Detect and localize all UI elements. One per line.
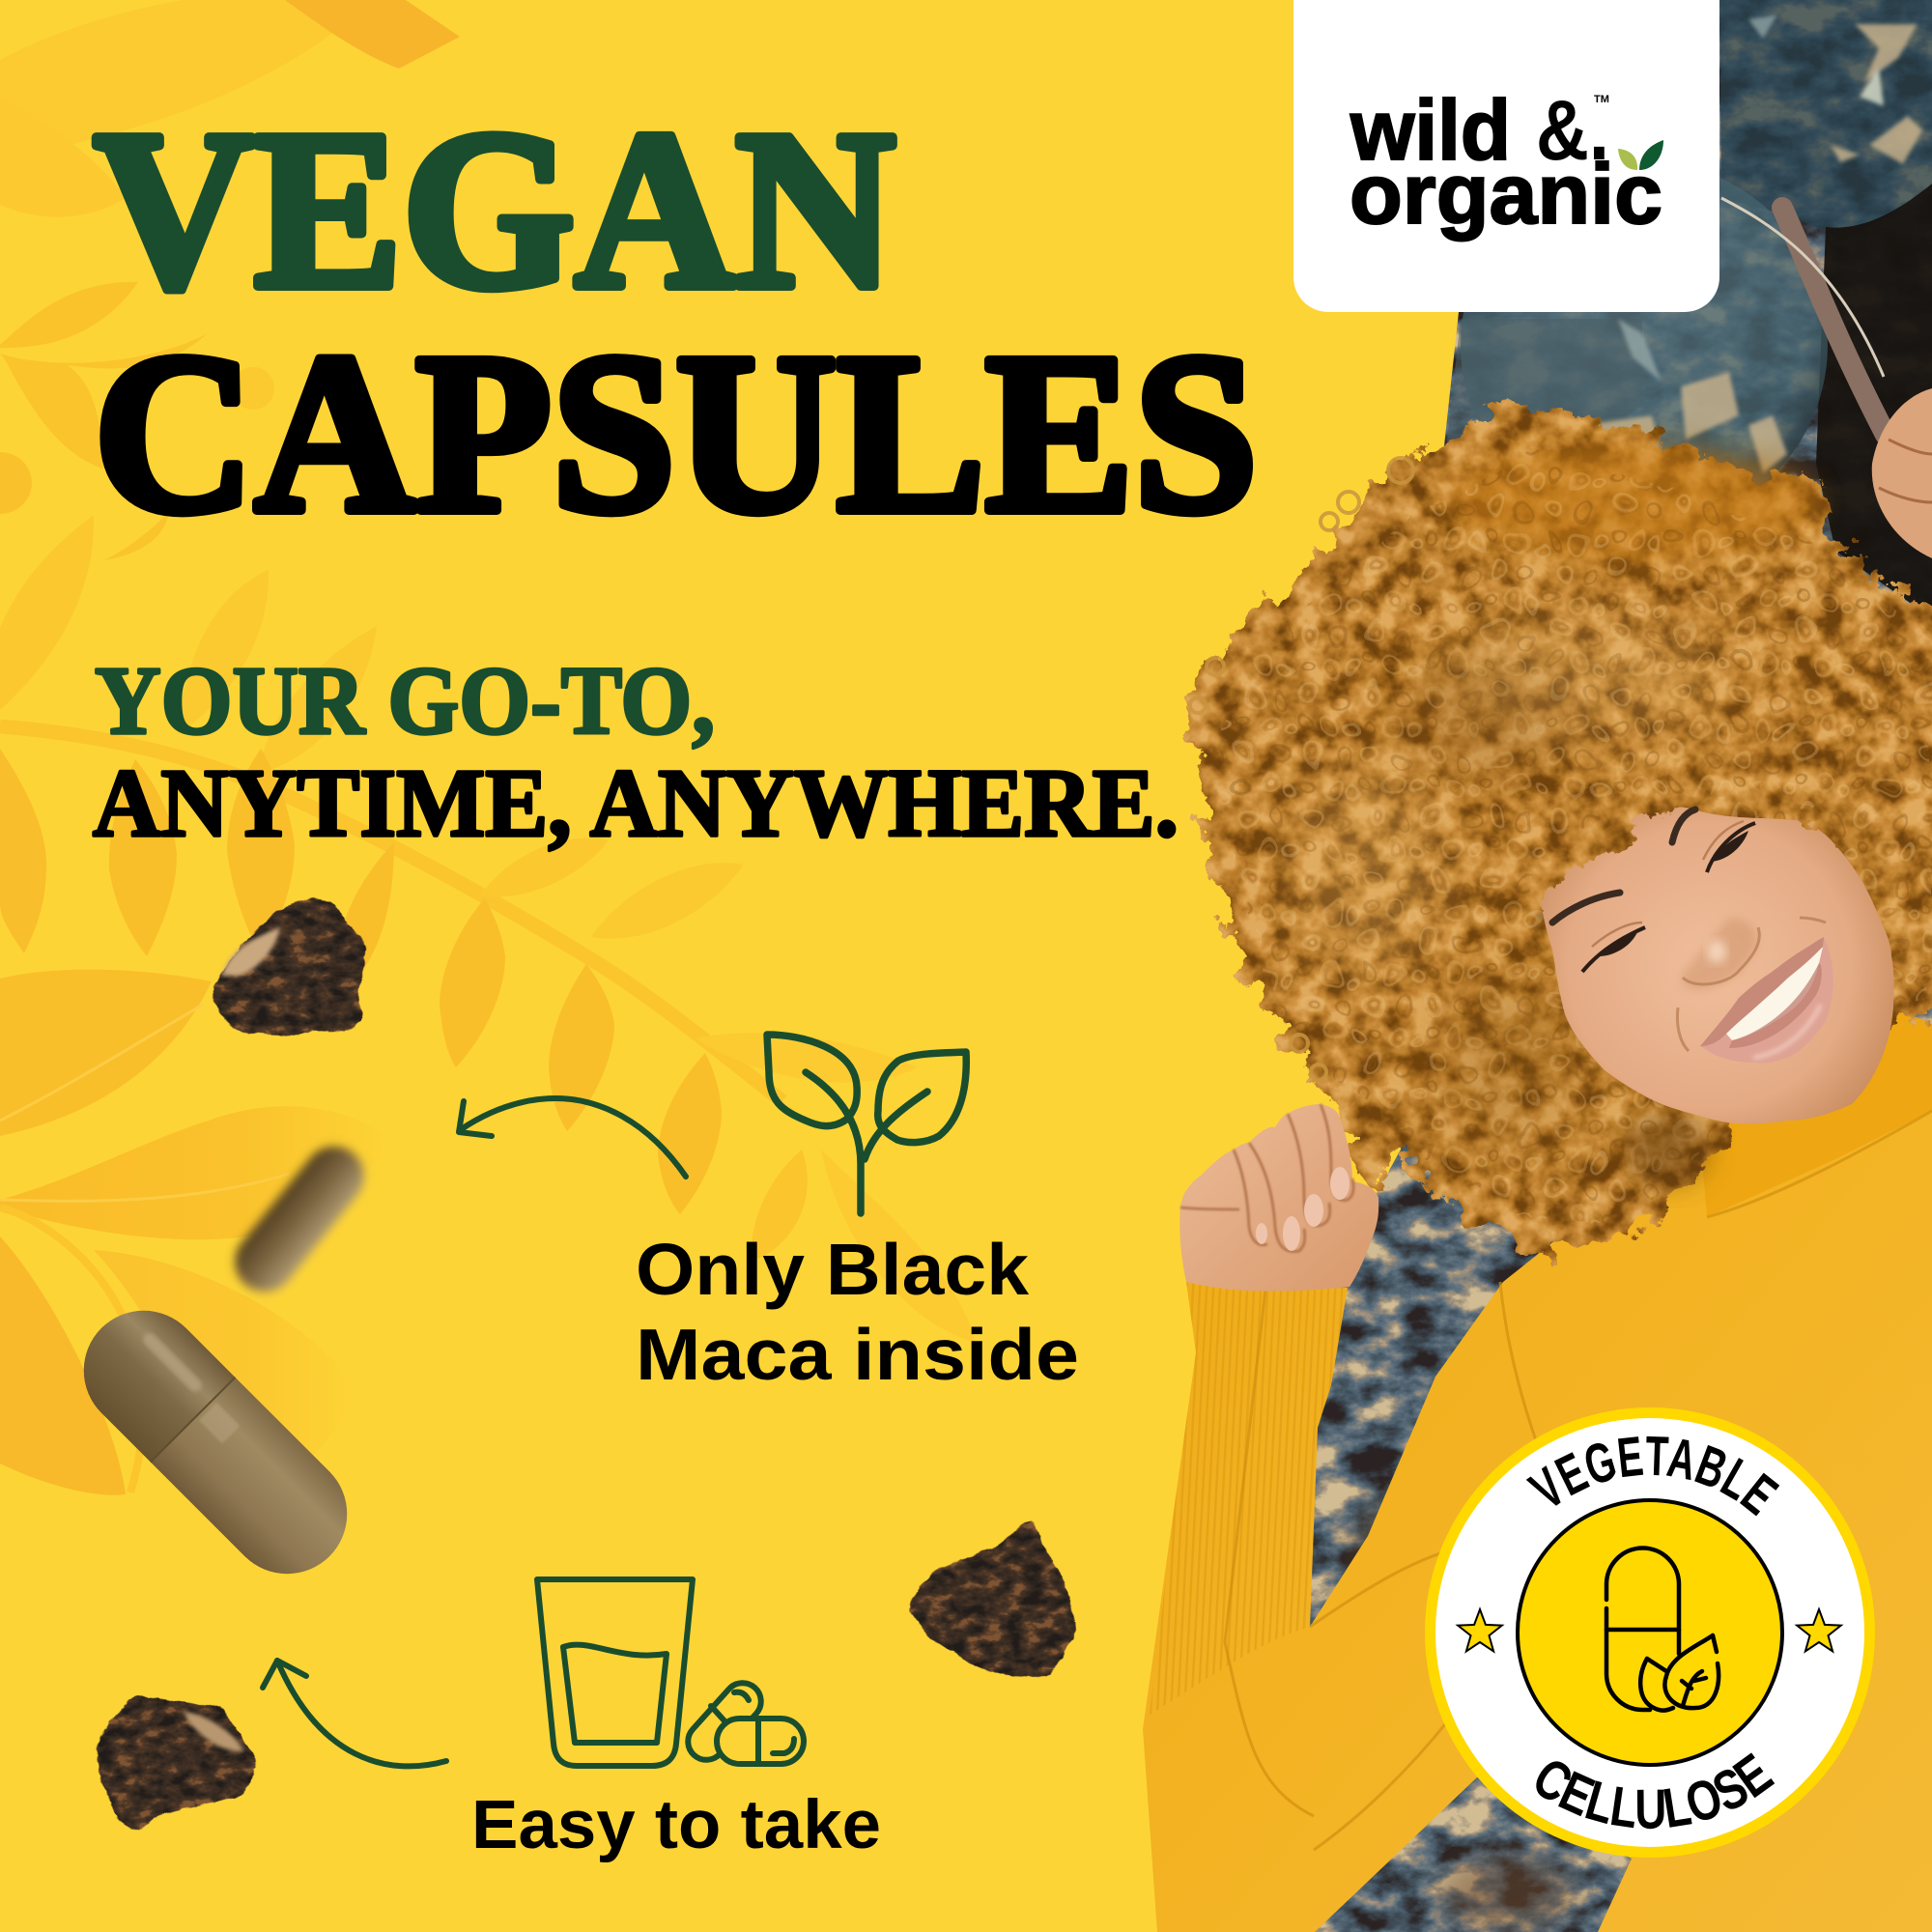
smile lines bbox=[1677, 918, 1826, 1051]
badge text: VEGETABLE: VEGETABLE bbox=[1526, 1435, 1779, 1517]
small blurred capsule bbox=[223, 1134, 376, 1304]
maca root top bbox=[211, 896, 365, 1036]
hand at the right edge bbox=[1872, 388, 1932, 558]
large capsule bbox=[59, 1286, 372, 1599]
logo ampersand: &. bbox=[1536, 82, 1609, 178]
raised fist bbox=[1179, 1104, 1378, 1292]
label: only black maca inside bbox=[636, 1229, 1079, 1395]
woman's face bbox=[1539, 807, 1893, 1123]
label: only black maca inside: Maca inside bbox=[636, 1314, 1079, 1395]
icon: glass of water with pills bbox=[537, 1579, 804, 1768]
badge capsule with leaves icon bbox=[1606, 1548, 1719, 1711]
main heading: VEGAN: VEGAN bbox=[94, 84, 895, 335]
arrow to capsules from plant bbox=[459, 1098, 686, 1177]
badge text: CELLULOSE: CELLULOSE bbox=[1536, 1752, 1776, 1830]
label: easy to take: Easy to take bbox=[471, 1787, 881, 1863]
logo trademark: TM bbox=[1594, 94, 1609, 105]
mustard sweater bbox=[1143, 1010, 1932, 1932]
badge: vegetable cellulose bbox=[1425, 1407, 1875, 1858]
mouth and smile bbox=[1700, 937, 1833, 1064]
icon: plant sprout bbox=[767, 1035, 966, 1213]
hair fringe over the forehead bbox=[1531, 782, 1840, 910]
logo text: organic: organic bbox=[1350, 146, 1662, 242]
logo card bbox=[1293, 0, 1719, 312]
label: only black maca inside: Only Black bbox=[636, 1229, 1029, 1310]
logo text: wild: wild bbox=[1350, 82, 1511, 178]
nose bbox=[1682, 918, 1759, 990]
main heading: CAPSULES: CAPSULES bbox=[94, 307, 1258, 560]
right eye bbox=[1703, 821, 1755, 872]
maca root bottom bbox=[96, 1694, 259, 1833]
subheading green: YOUR GO-TO, bbox=[95, 646, 715, 754]
photo background: black maca roots bbox=[1294, 0, 1932, 1932]
background leaf pattern bbox=[0, 0, 976, 1495]
curly hair bbox=[1190, 406, 1932, 1252]
left eyebrow bbox=[1552, 893, 1620, 923]
left eye bbox=[1582, 923, 1645, 972]
logo leaves bbox=[1618, 140, 1663, 170]
subheading black: ANYTIME, ANYWHERE. bbox=[93, 749, 1179, 857]
arrow to capsule from glass bbox=[263, 1661, 446, 1766]
maca root right bbox=[907, 1515, 1077, 1677]
right brow bbox=[1672, 810, 1695, 842]
badge stars bbox=[1458, 1609, 1841, 1651]
